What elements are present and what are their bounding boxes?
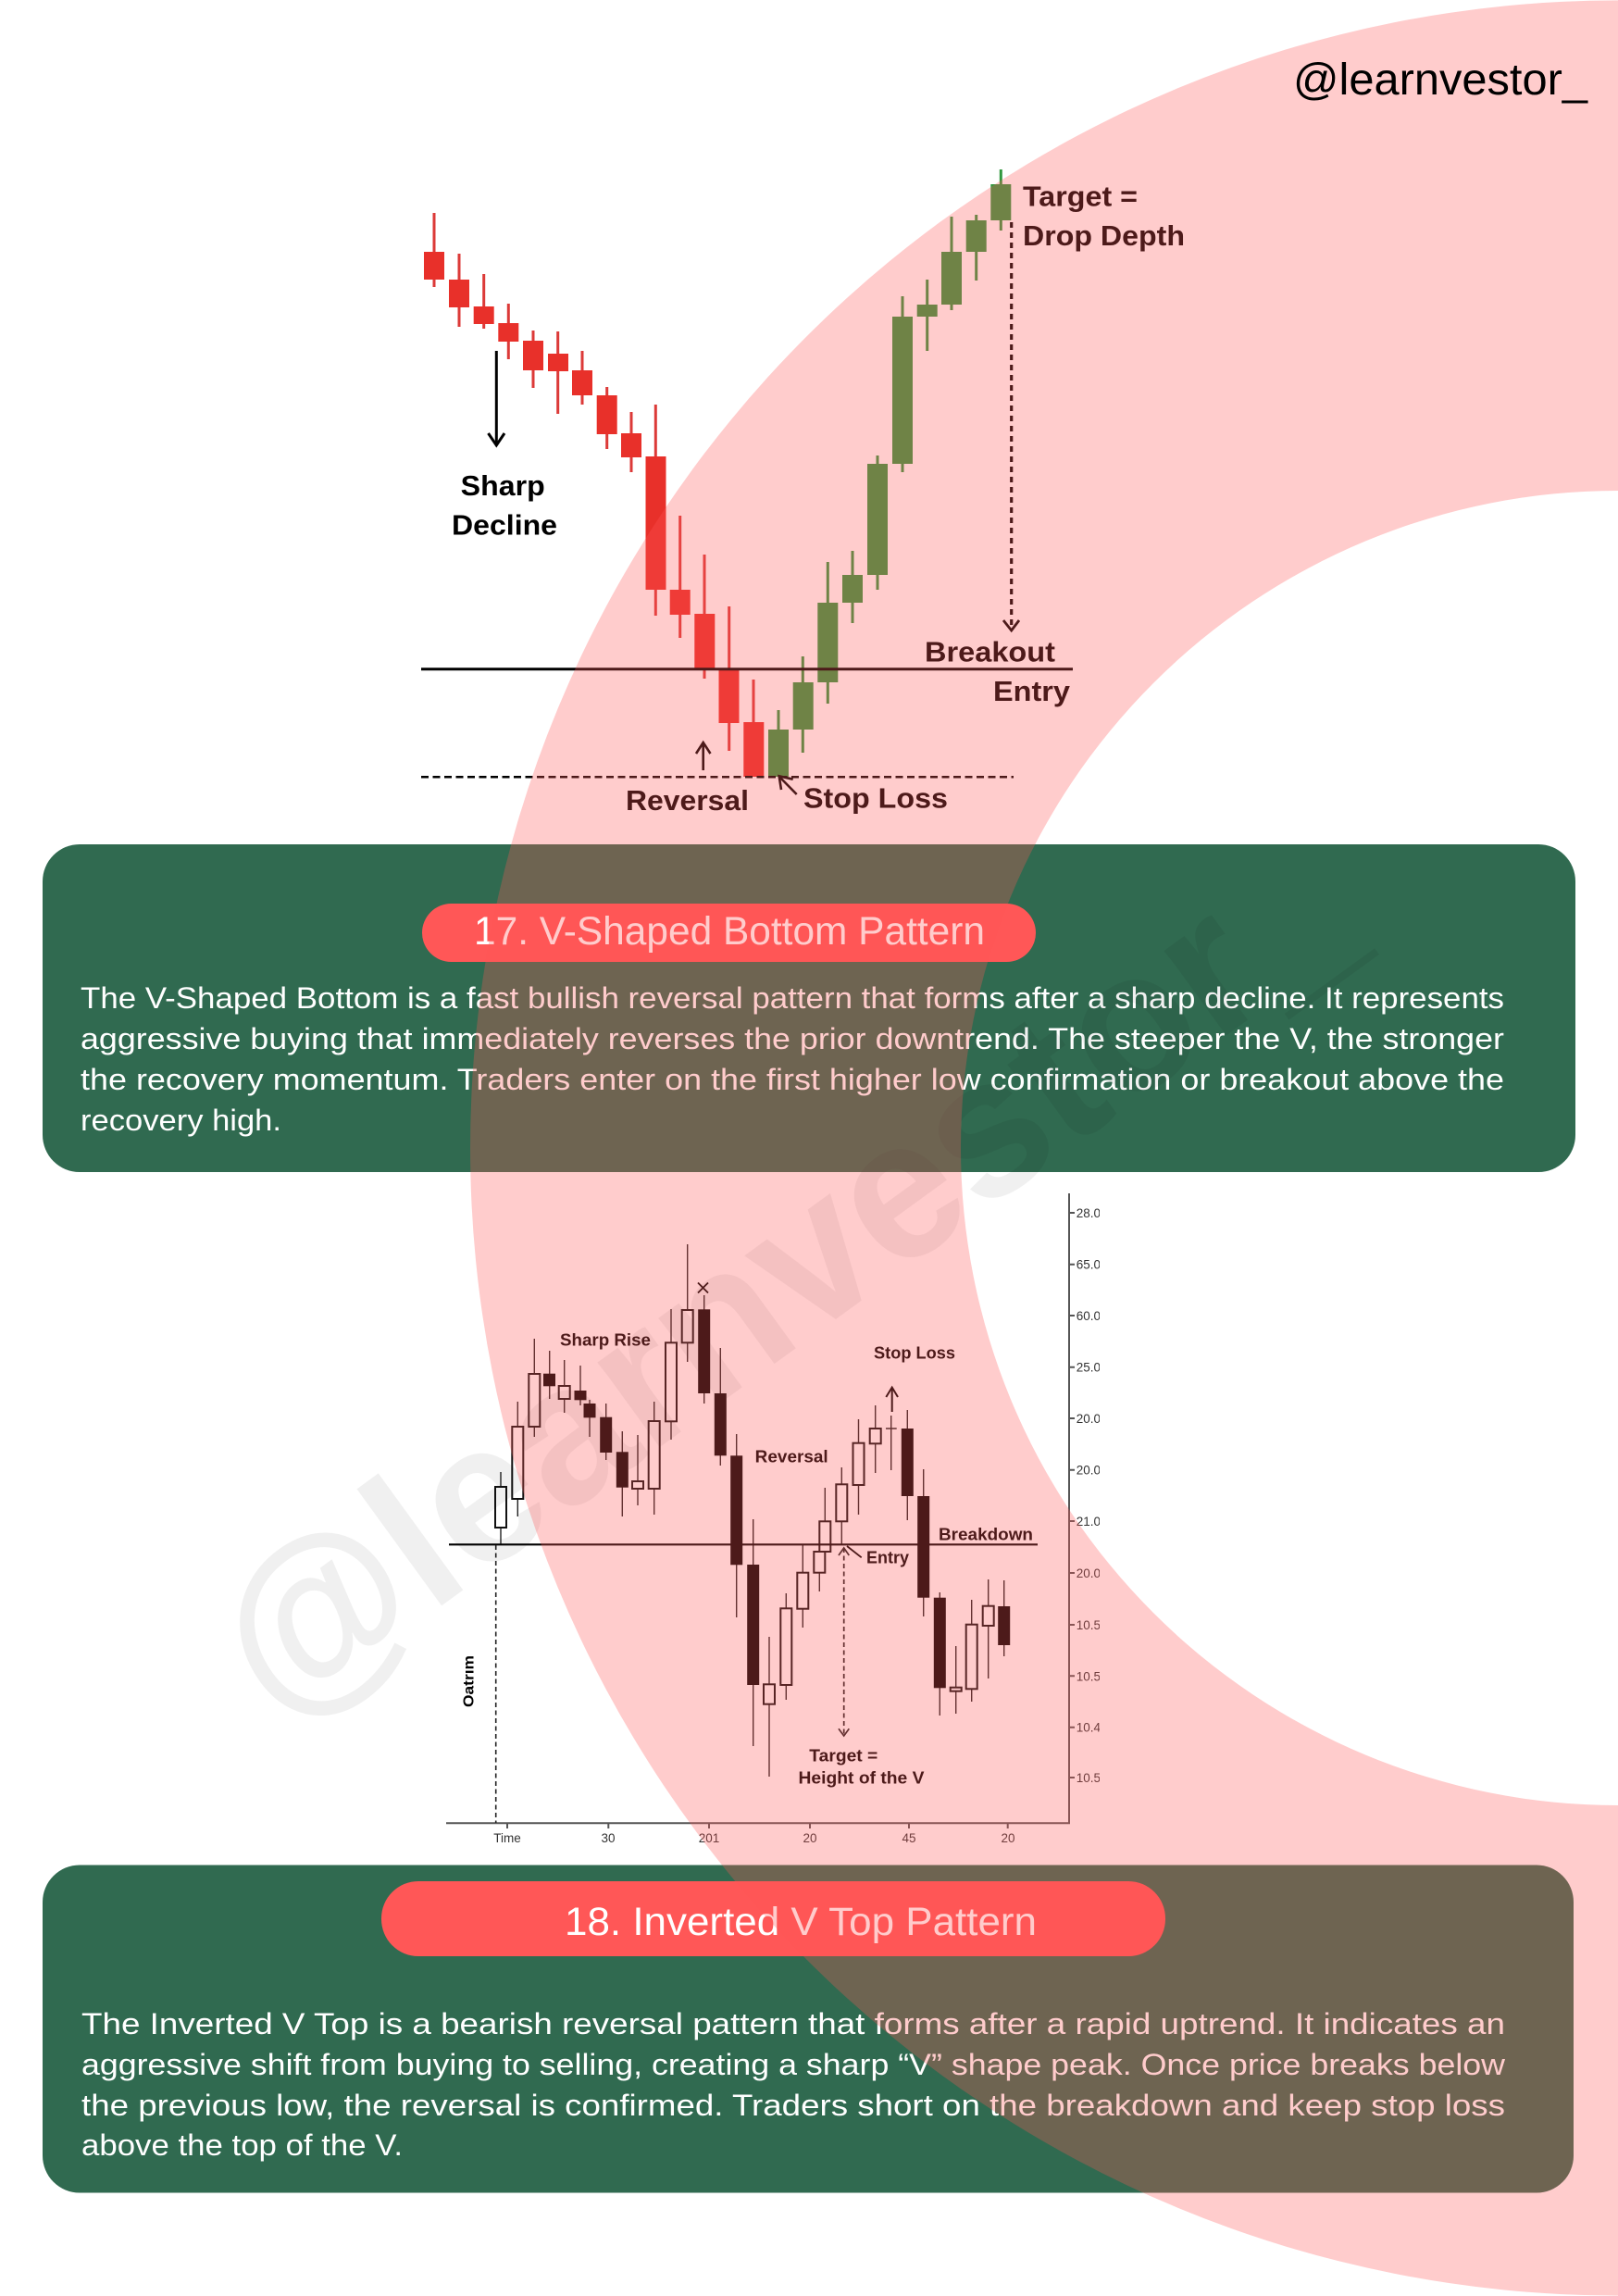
axes <box>446 1193 1075 1828</box>
wicks <box>501 1244 1004 1777</box>
description: The V-Shaped Bottom is a fast bullish reversal pattern that forms after a sharp decline. It represents <box>81 981 1504 1015</box>
arrow: target drop depth <box>1003 222 1019 630</box>
label: breakdown: Breakdown <box>939 1525 1033 1543</box>
price axis labels: 60.00 <box>1077 1309 1107 1323</box>
label: reversal: Reversal <box>755 1447 828 1466</box>
description: the previous low, the reversal is confirmed. Traders short on the breakdown and keep stop loss <box>81 2089 1505 2122</box>
label: sharp decline: Decline <box>452 508 557 541</box>
price axis labels: 10.50 <box>1077 1669 1107 1683</box>
arrow: stop loss up <box>886 1387 898 1412</box>
price axis labels: 21.00 <box>1077 1515 1107 1529</box>
description: The Inverted V Top is a bearish reversal pattern that forms after a rapid uptrend. It indicates an <box>81 2007 1505 2040</box>
arrow: target height <box>839 1548 849 1736</box>
price axis labels: 20.00 <box>1077 1412 1107 1426</box>
description: above the top of the V. <box>81 2128 403 2162</box>
price axis labels: 10.50 <box>1077 1771 1107 1785</box>
label: sharp decline <box>452 469 557 541</box>
time axis labels: 20 <box>803 1831 817 1845</box>
stop loss dashed line <box>421 776 1014 779</box>
heading pill <box>381 1881 1165 1956</box>
price axis labels: 20.00 <box>1077 1464 1107 1478</box>
price axis labels: 28.00 <box>1077 1206 1107 1220</box>
price axis labels: 25.00 <box>1077 1361 1107 1375</box>
time axis labels: 45 <box>902 1831 916 1845</box>
breakdown line <box>449 1543 1038 1545</box>
heading pill: 17. V-Shaped Bottom Pattern <box>474 909 985 954</box>
label: sharp decline: Sharp <box>461 469 545 502</box>
panel: V-shaped bottom <box>43 844 1575 1172</box>
time axis labels <box>493 1831 1015 1845</box>
heading pill: 18. Inverted V Top Pattern <box>565 1900 1037 1944</box>
label: reversal: Reversal <box>626 784 749 817</box>
arrow: stop loss <box>779 776 797 794</box>
label: sharp rise: Sharp Rise <box>560 1330 651 1349</box>
arrow: reversal <box>696 742 711 770</box>
hollow candles <box>495 1310 994 1704</box>
description: recovery high. <box>81 1104 281 1137</box>
price axis labels: 20.00 <box>1077 1566 1107 1580</box>
chart: inverted V top candlesticks <box>446 1193 1107 1845</box>
marker: peak cross <box>698 1283 708 1292</box>
vertical axis label: Oatrım <box>462 1655 478 1707</box>
arrow: sharp decline <box>489 351 504 445</box>
price axis labels: 10.50 <box>1077 1618 1107 1632</box>
label: breakout entry <box>925 635 1071 707</box>
label: target: Target = <box>809 1746 877 1765</box>
label: target: Drop Depth <box>1023 219 1185 252</box>
description: aggressive buying that immediately reverses the prior downtrend. The steeper the V, the stronger <box>81 1022 1504 1055</box>
label: target: Target = <box>1023 180 1138 212</box>
heading pill <box>422 904 1036 962</box>
time axis labels: Time <box>493 1831 521 1845</box>
label: entry: Entry <box>866 1548 909 1566</box>
label: stop loss: Stop Loss <box>874 1343 955 1362</box>
description <box>81 981 1504 1137</box>
red falling candles <box>424 213 764 777</box>
time axis labels: 20 <box>1001 1831 1015 1845</box>
background ring overlay <box>470 0 1618 2296</box>
label: stop loss: Stop Loss <box>803 782 948 815</box>
green rising candles <box>768 169 1011 777</box>
label: target <box>1023 180 1185 252</box>
handle: @learnvestor_ <box>1293 56 1588 105</box>
label: target: Height of the V <box>798 1769 924 1788</box>
filled candles <box>543 1309 1010 1688</box>
price axis labels: 10.40 <box>1077 1721 1107 1735</box>
description: the recovery momentum. Traders enter on the first higher low confirmation or breakout above the <box>81 1063 1504 1096</box>
chart: V-shaped bottom candlesticks <box>421 169 1185 817</box>
price axis labels: 65.00 <box>1077 1258 1107 1272</box>
dashed time marker <box>495 1545 497 1823</box>
description <box>81 2007 1506 2162</box>
watermark: @learnvestor_ <box>171 789 1390 1759</box>
arrow: entry pointer <box>847 1546 862 1557</box>
label: breakout entry: Breakout <box>925 635 1055 668</box>
breakout line <box>421 668 1073 670</box>
description: aggressive shift from buying to selling, creating a sharp “V” shape peak. Once price breaks below <box>81 2048 1506 2081</box>
time axis labels: 30 <box>601 1831 616 1845</box>
label: target <box>798 1746 924 1788</box>
panel: inverted V top <box>43 1865 1574 2192</box>
price axis labels <box>1077 1206 1107 1785</box>
label: breakout entry: Entry <box>993 675 1071 707</box>
time axis labels: 201 <box>699 1831 719 1845</box>
